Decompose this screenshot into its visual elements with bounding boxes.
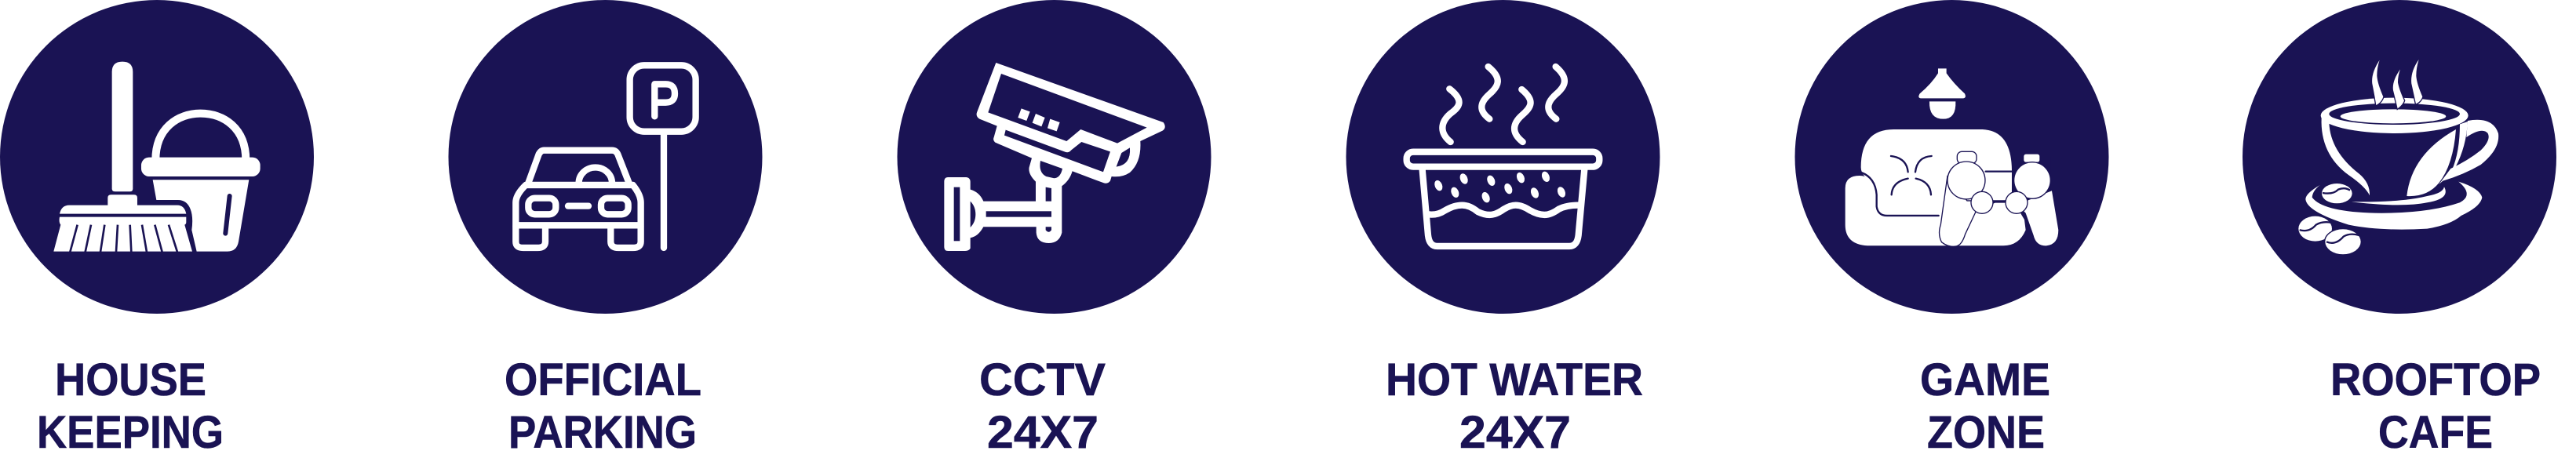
label: ROOFTOP CAFE: CAFE	[2378, 407, 2493, 458]
label: HOUSE KEEPING: HOUSE	[55, 354, 206, 405]
icon: coffee cup and beans	[2298, 60, 2498, 254]
label: HOUSE KEEPING: KEEPING	[37, 407, 224, 458]
icon: broom and bucket	[53, 62, 261, 252]
panel: cctv	[898, 0, 1211, 458]
label: HOT WATER 24X7	[1386, 354, 1643, 458]
label: CCTV 24X7: 24X7	[987, 407, 1099, 458]
label: OFFICIAL PARKING: OFFICIAL	[505, 354, 701, 405]
label: ROOFTOP CAFE: ROOFTOP	[2330, 354, 2541, 405]
circle badge: cctv	[898, 0, 1211, 314]
icon: lamp sofa and controller	[1845, 68, 2058, 246]
label: ROOFTOP CAFE	[2330, 354, 2541, 458]
panel: game zone	[1795, 0, 2109, 458]
label: CCTV 24X7: CCTV	[979, 354, 1106, 405]
label: GAME ZONE: ZONE	[1927, 407, 2045, 458]
circle badge: official parking	[449, 0, 763, 314]
label: GAME ZONE: GAME	[1920, 354, 2050, 405]
icon: car and parking sign	[516, 65, 696, 248]
panel: official parking	[449, 0, 763, 458]
icon: security camera	[944, 63, 1165, 251]
circle badge: game zone	[1795, 0, 2109, 314]
label: HOUSE KEEPING	[37, 354, 224, 458]
panel: rooftop cafe	[2243, 0, 2556, 458]
label: HOT WATER 24X7: HOT WATER	[1386, 354, 1643, 405]
circle badge: hot water	[1346, 0, 1660, 314]
label: CCTV 24X7	[979, 354, 1106, 458]
panel: hot water	[1346, 0, 1660, 458]
icon: steaming pot	[1407, 67, 1599, 246]
label: OFFICIAL PARKING	[505, 354, 701, 458]
label: HOT WATER 24X7: 24X7	[1459, 407, 1571, 458]
circle badge: house keeping	[0, 0, 314, 314]
label: OFFICIAL PARKING: PARKING	[508, 407, 697, 458]
circle badge: rooftop cafe	[2243, 0, 2556, 314]
label: GAME ZONE	[1920, 354, 2050, 458]
panel: house keeping	[0, 0, 314, 458]
